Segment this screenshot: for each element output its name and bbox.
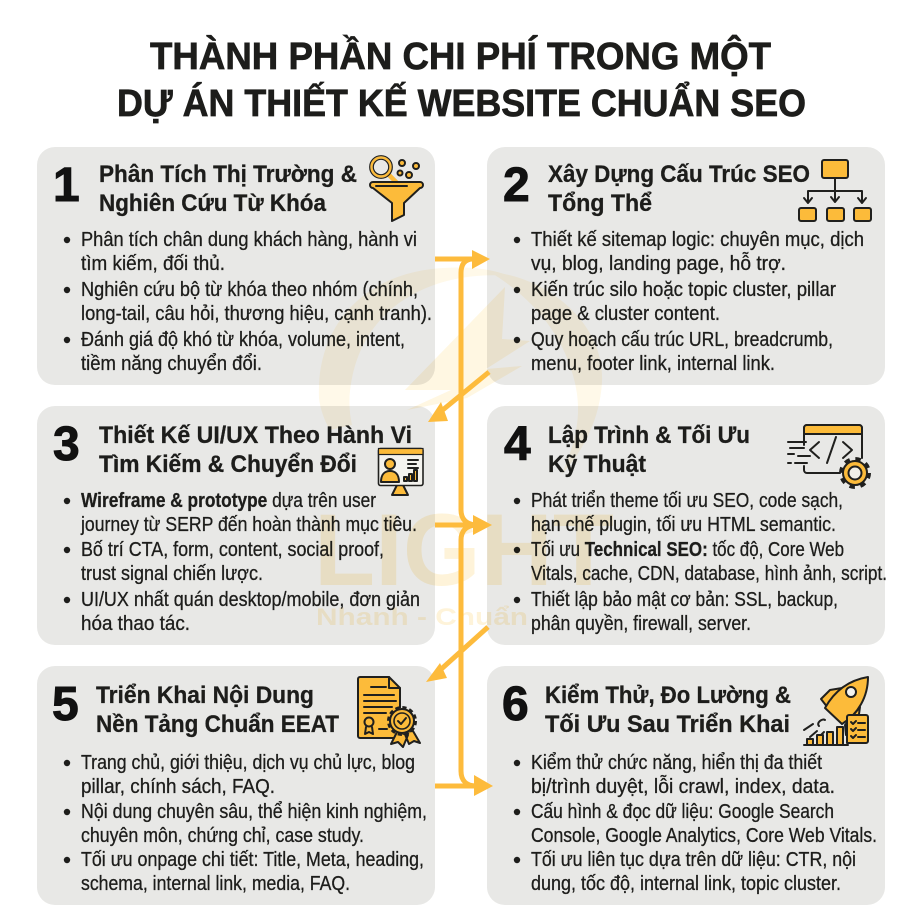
icon: monitor with user and chart (378, 448, 423, 495)
panel: step 4 development (487, 406, 887, 645)
panel: step 3 UI/UX design: UI/UX nhất quán desktop/mobile, đơn giản (81, 588, 420, 611)
icon: certificate with badge (358, 677, 420, 747)
arrow: diagonal from step 4 to step 5 (426, 627, 488, 682)
panel: step 4 development: Phát triển theme tối ưu SEO, code sạch, (531, 489, 843, 512)
watermark: Light logo: Nhanh - Chuẩn (316, 604, 528, 631)
panel: step 5 content: Triển Khai Nội Dung (96, 682, 314, 709)
panel: step 1 market research: Nghiên Cứu Từ Khóa (99, 190, 326, 217)
panel: step 6 testing: Kiểm Thử, Đo Lường & (545, 682, 791, 709)
panel: step 2 SEO structure: 2 (503, 159, 530, 212)
panel: step 2 SEO structure: vụ, blog, landing page, hỗ trợ. (531, 252, 786, 275)
panel: step 2 SEO structure: Quy hoạch cấu trúc URL, breadcrumb, (531, 328, 833, 351)
panel: step 6 testing: Tối ưu liên tục dựa trên dữ liệu: CTR, nội (531, 848, 856, 871)
panel: step 5 content: Nền Tảng Chuẩn EEAT (96, 711, 339, 738)
panel: step 1 market research: Phân Tích Thị Trường & (99, 161, 357, 188)
arrow: flow from step 1 to step 2 (435, 250, 490, 269)
icon: rocket with bars and checklist (804, 677, 868, 745)
panel: step 5 content: chuyên môn, chứng chỉ, case study. (81, 824, 364, 847)
panel: step 3 UI/UX design: trust signal chiến lược. (81, 562, 263, 585)
panel: step 5 content: 5 (52, 678, 79, 731)
panel: step 2 SEO structure: menu, footer link, internal link. (531, 352, 775, 375)
panel: step 6 testing: bị/trình duyệt, lỗi crawl, index, data. (531, 775, 835, 798)
icon: sitemap hierarchy (799, 160, 871, 221)
panel: step 3 UI/UX design: Tìm Kiếm & Chuyển Đổi (99, 451, 357, 478)
panel: step 6 testing: Tối Ưu Sau Triển Khai (545, 711, 790, 738)
panel: step 5 content: Nội dung chuyên sâu, thể hiện kinh nghiệm, (81, 800, 427, 823)
panel: step 5 content: pillar, chính sách, FAQ. (81, 775, 275, 798)
arrow: vertical connector to step 4 (435, 259, 492, 535)
panel: step 1 market research: Nghiên cứu bộ từ khóa theo nhóm (chính, (81, 278, 418, 301)
panel: step 1 market research (37, 147, 435, 385)
panel: step 4 development: phân quyền, firewall, server. (531, 612, 751, 635)
watermark: Light logo (314, 267, 614, 631)
panel: step 6 testing: Cấu hình & đọc dữ liệu: Google Search (531, 800, 834, 823)
panel: step 2 SEO structure: Kiến trúc silo hoặc topic cluster, pillar (531, 278, 836, 301)
panel: step 4 development: Tối ưu Technical SEO: tốc độ, Core Web (531, 538, 844, 561)
panel: step 4 development: Thiết lập bảo mật cơ bản: SSL, backup, (531, 588, 838, 611)
title: DỰ ÁN THIẾT KẾ WEBSITE CHUẨN SEO (117, 80, 806, 125)
panel: step 2 SEO structure (487, 147, 885, 385)
panel: step 3 UI/UX design: Thiết Kế UI/UX Theo Hành Vi (99, 422, 412, 449)
arrow: diagonal from step 2 to step 3 (428, 372, 489, 422)
title: THÀNH PHẦN CHI PHÍ TRONG MỘT (150, 33, 771, 78)
title (117, 33, 806, 125)
panel: step 2 SEO structure: Tổng Thể (548, 190, 652, 217)
panel: step 3 UI/UX design: 3 (53, 418, 80, 471)
panel: step 3 UI/UX design (37, 406, 435, 645)
panel: step 3 UI/UX design: Bố trí CTA, form, content, social proof, (81, 538, 384, 561)
panel: step 4 development: Kỹ Thuật (548, 451, 646, 478)
panel: step 1 market research: 1 (53, 159, 80, 212)
panel: step 3 UI/UX design: hóa thao tác. (81, 612, 190, 635)
panel: step 1 market research: long-tail, câu hỏi, thương hiệu, cạnh tranh). (81, 302, 432, 325)
panel: step 1 market research: tiềm năng chuyển đổi. (81, 352, 262, 375)
panel: step 1 market research: Đánh giá độ khó từ khóa, volume, intent, (81, 328, 405, 351)
panel: step 6 testing (487, 666, 885, 905)
panel: step 1 market research: Phân tích chân dung khách hàng, hành vi (81, 228, 417, 251)
icon: code window with gear (788, 425, 868, 486)
panel: step 4 development: Lập Trình & Tối Ưu (548, 422, 750, 449)
panel: step 1 market research: tìm kiếm, đối thủ. (81, 252, 225, 275)
panel: step 4 development: 4 (504, 418, 531, 471)
panel: step 2 SEO structure: Xây Dựng Cấu Trúc SEO (548, 161, 810, 188)
arrow: vertical connector to step 6 (435, 525, 493, 796)
panel: step 3 UI/UX design: Wireframe & prototype dựa trên user (81, 489, 376, 512)
panel: step 6 testing: Kiểm thử chức năng, hiển thị đa thiết (531, 751, 822, 774)
panel: step 5 content: schema, internal link, media, FAQ. (81, 872, 350, 895)
panel: step 2 SEO structure: page & cluster content. (531, 302, 720, 325)
watermark: Light logo: LIGHT (314, 493, 614, 607)
panel: step 3 UI/UX design: journey từ SERP đến hoàn thành mục tiêu. (80, 513, 417, 536)
panel: step 2 SEO structure: Thiết kế sitemap logic: chuyên mục, dịch (531, 228, 864, 251)
panel: step 5 content: Trang chủ, giới thiệu, dịch vụ chủ lực, blog (81, 751, 415, 774)
icon: magnifier over funnel (370, 156, 423, 221)
panel: step 5 content (37, 666, 435, 905)
panel: step 6 testing: 6 (502, 678, 529, 731)
panel: step 6 testing: dung, tốc độ, internal link, topic cluster. (531, 872, 841, 895)
panel: step 4 development: hạn chế plugin, tối ưu HTML semantic. (531, 513, 836, 536)
panel: step 5 content: Tối ưu onpage chi tiết: Title, Meta, heading, (81, 848, 424, 871)
